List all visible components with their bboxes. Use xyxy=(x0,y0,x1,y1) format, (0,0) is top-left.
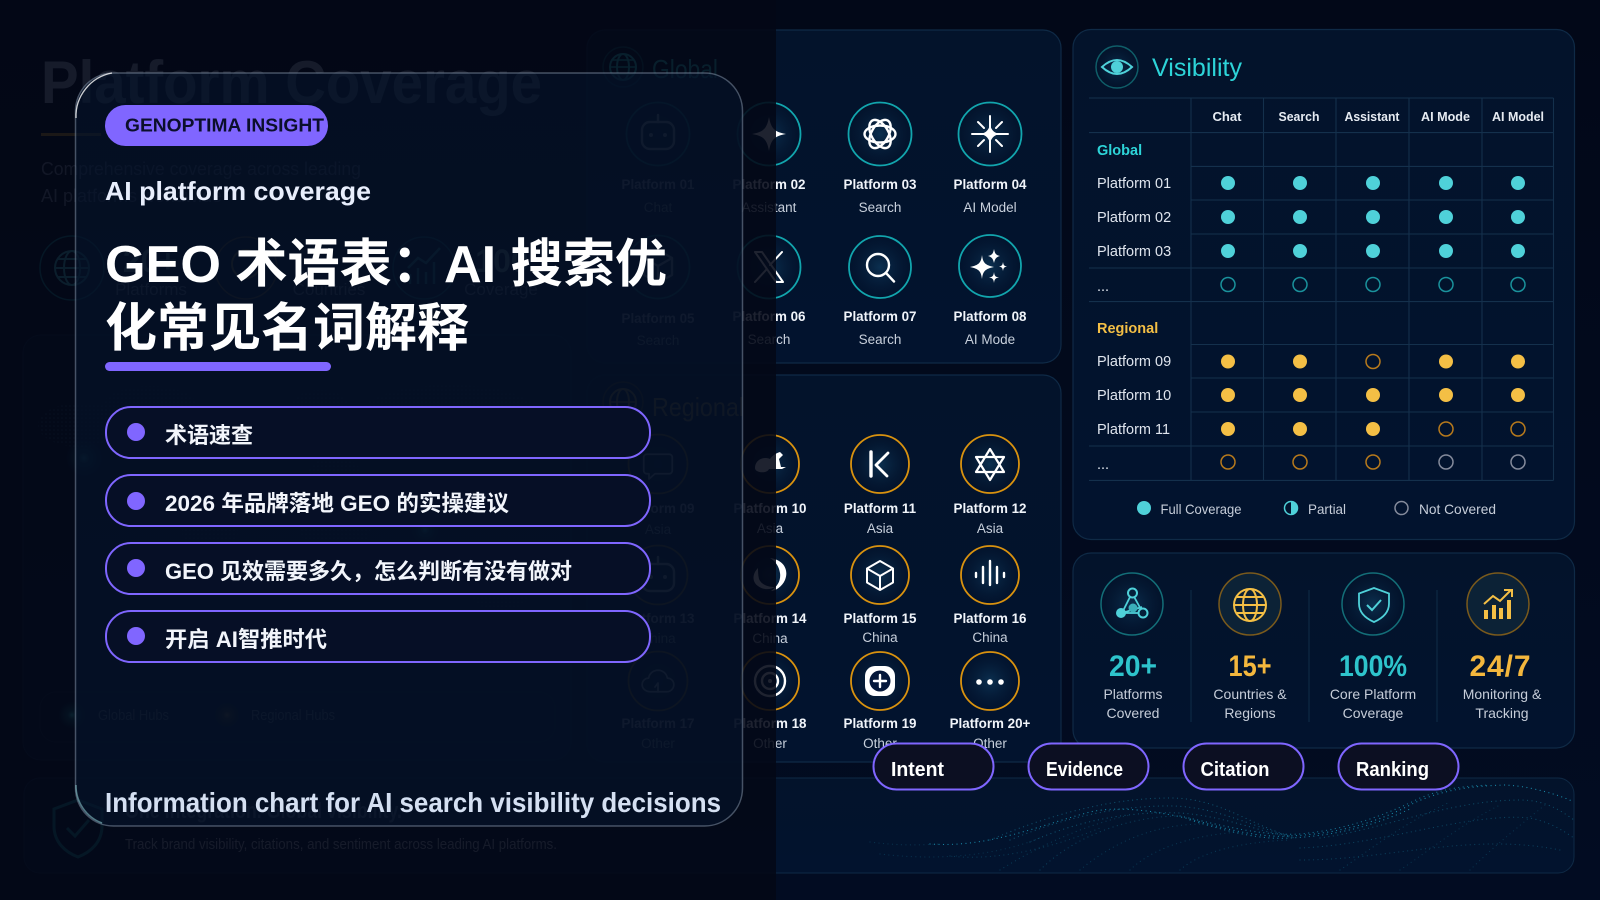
table header: Assistant xyxy=(1344,109,1400,124)
platform 01: Chat xyxy=(644,200,672,215)
global heading: Global xyxy=(652,54,718,84)
legend: Partial xyxy=(1308,501,1346,517)
platform 19 xyxy=(844,652,916,751)
platform 15 xyxy=(844,546,917,645)
platform 13: Platform 13 xyxy=(622,611,694,626)
platform 15: China xyxy=(862,630,898,645)
platform 19: Platform 19 xyxy=(844,716,916,731)
regional heading: Regional xyxy=(652,392,744,422)
list item 1 xyxy=(106,407,650,458)
platform 02: Platform 02 xyxy=(733,177,805,192)
panel: regional platforms xyxy=(587,375,1061,762)
badge: genoptima insight xyxy=(105,105,328,146)
dotted data wave xyxy=(870,785,1574,870)
faded heading: platform coverage: AI platforms worldwide xyxy=(41,186,222,206)
stat: countries: Countries & xyxy=(1213,686,1287,702)
panel: global platforms xyxy=(587,30,1061,363)
platform 05 xyxy=(622,236,695,348)
table header: Chat xyxy=(1212,109,1242,124)
platform 10: Platform 10 xyxy=(734,501,806,516)
stat: countries: 15+ xyxy=(1228,650,1272,683)
platform 17: Platform 17 xyxy=(622,716,694,731)
platform 08: AI Mode xyxy=(965,332,1015,347)
panel: wave banner xyxy=(24,778,1574,873)
icon: eye xyxy=(1096,46,1138,88)
legend: Not Covered xyxy=(1419,501,1496,517)
list item 4: 开启 AI智推时代 xyxy=(165,627,327,652)
platform 12 xyxy=(954,435,1026,536)
stat: core coverage: Core Platform xyxy=(1330,686,1416,702)
platform 20+: Platform 20+ xyxy=(950,716,1031,731)
platform 19: Other xyxy=(863,736,897,751)
main title: GEO 术语表：AI 搜索优 xyxy=(105,236,667,294)
platform 16 xyxy=(954,546,1026,645)
stat: platforms xyxy=(1101,573,1163,721)
platform 11: Platform 11 xyxy=(844,501,917,516)
panel: visibility matrix xyxy=(1073,30,1574,540)
badge: genoptima insight: GENOPTIMA INSIGHT xyxy=(125,114,325,136)
faded heading: platform coverage: Platform Coverage xyxy=(41,49,542,116)
faded shield icon xyxy=(54,800,102,857)
stat: monitoring: 24/7 xyxy=(1470,650,1530,683)
stat: platforms: Platforms xyxy=(1103,686,1163,702)
row labels: Platform 03 xyxy=(1097,244,1171,260)
platform 09: Platform 09 xyxy=(622,501,694,516)
platform 07 xyxy=(844,236,916,347)
platform 09: Asia xyxy=(645,522,672,537)
faded panel: world map: Regional Hubs xyxy=(251,708,335,724)
table header xyxy=(1212,109,1544,124)
subtitle: AI platform coverage xyxy=(105,176,371,206)
table header: AI Model xyxy=(1492,109,1544,124)
global coverage dots xyxy=(1221,176,1525,292)
faded integration text xyxy=(125,798,557,853)
stat: monitoring: Tracking xyxy=(1475,705,1529,721)
list item 1: 术语速查 xyxy=(165,423,253,448)
chip: citation xyxy=(1184,744,1304,790)
stat: core coverage: Coverage xyxy=(1343,705,1404,721)
platform 13: China xyxy=(640,631,676,646)
list item 4 xyxy=(106,611,650,662)
list item 2 xyxy=(106,475,650,526)
platform 15: Platform 15 xyxy=(844,611,917,626)
platform 10: Asia xyxy=(757,521,784,536)
faded panel: world map: Global Hubs xyxy=(98,708,169,724)
platform 05: Search xyxy=(637,333,679,348)
list item 3: GEO 见效需要多久，怎么判断有没有做对 xyxy=(165,559,572,584)
row labels: ... xyxy=(1097,279,1109,295)
title underline xyxy=(105,362,331,371)
stat: core coverage: 100% xyxy=(1339,650,1407,683)
platform 18: Other xyxy=(753,736,787,751)
platform 11 xyxy=(844,435,917,536)
platform 18: Platform 18 xyxy=(734,716,807,731)
platform 08: Platform 08 xyxy=(954,309,1027,324)
platform 11: Asia xyxy=(867,521,894,536)
platform 02: Assistant xyxy=(742,200,797,215)
list item 3 xyxy=(106,543,650,594)
global heading xyxy=(603,47,718,87)
stat: countries xyxy=(1213,573,1287,721)
platform 06: Search xyxy=(748,332,790,347)
faded stats row: 20+ xyxy=(123,243,177,279)
platform 20+ xyxy=(950,652,1031,751)
platform 09 xyxy=(622,434,694,537)
stat: countries: Regions xyxy=(1224,705,1276,721)
stat: core coverage xyxy=(1330,573,1416,721)
stat: platforms: Covered xyxy=(1107,705,1159,721)
regional coverage dots xyxy=(1221,354,1525,469)
faded stats row xyxy=(40,236,538,300)
legend xyxy=(1137,501,1496,517)
platform 01 xyxy=(622,102,695,215)
chip: ranking: Ranking xyxy=(1356,759,1429,781)
row labels: Platform 01 xyxy=(1097,176,1171,192)
platform 01: Platform 01 xyxy=(622,177,695,192)
stat: platforms: 20+ xyxy=(1109,650,1157,683)
chip: intent: Intent xyxy=(891,759,944,781)
chip: evidence xyxy=(1028,744,1148,790)
faded integration text: One integration. Global visibility. xyxy=(125,798,402,823)
panel: key stats xyxy=(1073,553,1574,748)
visibility heading: Visibility xyxy=(1152,54,1243,82)
row labels: Platform 10 xyxy=(1097,388,1171,404)
platform 12: Asia xyxy=(977,521,1004,536)
platform 07: Platform 07 xyxy=(844,309,916,324)
row labels: Platform 11 xyxy=(1097,422,1170,438)
table header: Search xyxy=(1278,109,1320,124)
platform 04: Platform 04 xyxy=(954,177,1027,192)
platform 07: Search xyxy=(859,332,901,347)
platform 05: Platform 05 xyxy=(622,311,695,326)
faded heading: platform coverage: Comprehensive coverage across leading xyxy=(41,159,361,179)
platform 06: Platform 06 xyxy=(733,309,805,324)
faded panel: world map xyxy=(23,335,571,760)
dotted world map xyxy=(38,385,540,610)
platform 16: China xyxy=(972,630,1008,645)
row labels: Regional xyxy=(1097,321,1158,337)
footer caption: Information chart for AI search visibility decisions xyxy=(105,787,721,818)
legend: Full Coverage xyxy=(1160,501,1242,517)
platform 14: Platform 14 xyxy=(734,611,807,626)
coverage table grid xyxy=(1089,98,1554,480)
row labels: ... xyxy=(1097,457,1109,473)
list item 2: 2026 年品牌落地 GEO 的实操建议 xyxy=(165,491,509,516)
main title: 化常见名词解释 xyxy=(105,300,469,358)
row labels: Platform 02 xyxy=(1097,210,1171,226)
chip: intent xyxy=(874,744,994,790)
platform 18 xyxy=(734,652,807,751)
platform 04 xyxy=(954,102,1027,215)
table header: AI Mode xyxy=(1421,109,1470,124)
platform 03: Platform 03 xyxy=(844,177,916,192)
faded integration text: Track brand visibility, citations, and sentiment across leading AI platforms. xyxy=(125,837,557,853)
platform 13 xyxy=(622,546,694,646)
main title xyxy=(105,236,667,358)
faded stats row: Countries xyxy=(293,280,365,299)
regional heading xyxy=(603,382,744,422)
faded stats row: Coverage xyxy=(464,280,538,299)
platform 16: Platform 16 xyxy=(954,611,1026,626)
row labels: Global xyxy=(1097,143,1142,159)
platform 02 xyxy=(733,102,805,215)
left dimming overlay xyxy=(0,0,776,900)
faded stats row: 100 xyxy=(475,243,529,279)
platform 12: Platform 12 xyxy=(954,501,1026,516)
platform 04: AI Model xyxy=(963,200,1017,215)
chip: citation: Citation xyxy=(1200,759,1270,781)
faded stats row: Platforms xyxy=(115,280,187,299)
platform 08 xyxy=(954,235,1027,347)
platform 14 xyxy=(734,546,807,646)
stat: monitoring: Monitoring & xyxy=(1463,686,1542,702)
platform 06 xyxy=(733,236,805,347)
platform 14: China xyxy=(752,631,788,646)
platform 20+: Other xyxy=(973,736,1007,751)
row labels xyxy=(1097,143,1171,473)
chip: evidence: Evidence xyxy=(1046,759,1123,781)
chip: ranking xyxy=(1338,744,1458,790)
platform 03: Search xyxy=(859,200,901,215)
faded heading: platform coverage xyxy=(41,49,542,206)
platform 17: Other xyxy=(641,736,675,751)
row labels: Platform 09 xyxy=(1097,354,1171,370)
platform 17 xyxy=(622,652,694,751)
platform 03 xyxy=(844,102,916,215)
stat: monitoring xyxy=(1463,573,1542,721)
panel: glass title card xyxy=(76,73,742,826)
platform 10 xyxy=(734,435,806,536)
